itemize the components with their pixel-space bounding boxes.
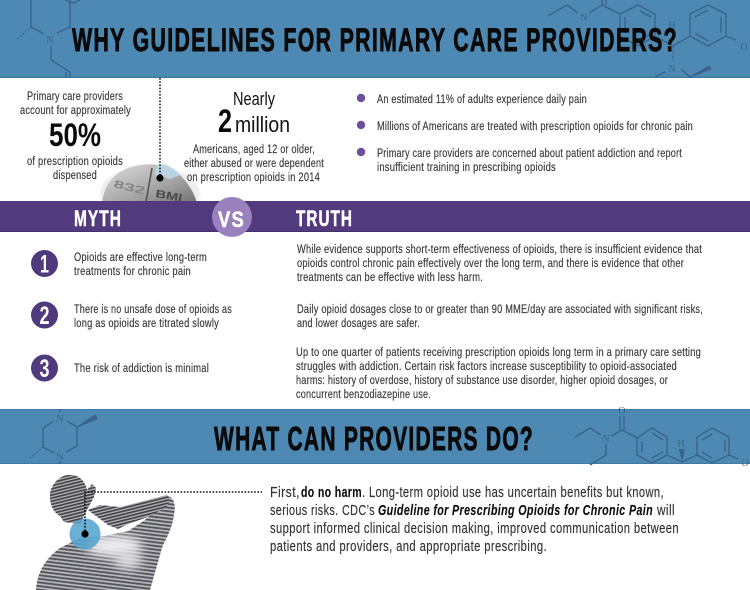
icon: molecule right: H	[668, 20, 676, 31]
bullet list: An estimated 11% of adults experience daily pain	[377, 92, 587, 106]
icon: molecule right: N	[580, 13, 588, 24]
stat: 2 million: 2	[218, 103, 232, 139]
icon: molecule right lower: N	[602, 434, 610, 445]
row 2: myth and truth: long as opioids are titrated slowly	[74, 316, 219, 330]
stat: 50 percent: 50%	[49, 117, 101, 153]
icon: molecule left	[16, 0, 80, 77]
stat: 2 million: on prescription opioids in 2014	[187, 170, 320, 184]
row 1: myth and truth: Opioids are effective long-term	[74, 250, 207, 264]
heading: myth: MYTH	[74, 206, 122, 231]
stat: 50 percent: dispensed	[53, 168, 97, 182]
stat: 50 percent: account for approximately	[20, 103, 131, 117]
text block: do no harm	[270, 485, 679, 555]
row 1: myth and truth: treatments can be effective with less harm.	[297, 270, 483, 284]
stat: 50 percent	[20, 89, 131, 182]
panel: top header	[0, 0, 750, 78]
text block: do no harm: serious risks. CDC’s	[270, 503, 375, 519]
divider with dot: pill callout	[156, 78, 164, 182]
icon: molecule right: N	[668, 64, 676, 75]
stat: 2 million: either abused or were dependent	[184, 156, 324, 170]
callout: dotted leader	[81, 492, 262, 538]
text block: do no harm: patients and providers, and appropriate prescribing.	[270, 539, 547, 555]
row 3: myth and truth	[31, 345, 701, 401]
stat: 50 percent: of prescription opioids	[27, 154, 123, 168]
highlight: blue pain circle	[70, 518, 100, 550]
text block: do no harm: will	[656, 503, 675, 519]
icon: pill: BMI	[154, 188, 183, 205]
icon: molecule left lower: N	[56, 452, 64, 463]
icon: molecule right	[548, 0, 748, 77]
row 2: myth and truth: and lower dosages are safer.	[297, 316, 420, 330]
stat: 2 million: million	[235, 112, 290, 137]
icon: molecule left: N	[46, 35, 54, 46]
row 1: myth and truth	[31, 242, 702, 284]
panel: myth vs truth band	[0, 197, 750, 237]
row 2: myth and truth	[31, 302, 703, 330]
icon: pill	[100, 164, 200, 222]
icon: molecule right lower: O	[618, 406, 626, 417]
vs badge: VS	[218, 207, 245, 232]
row 1: myth and truth: treatments for chronic pain	[74, 264, 191, 278]
row 1: myth and truth: 1	[40, 250, 49, 278]
stat: 2 million: Nearly	[233, 89, 275, 109]
text block: do no harm: . Long-term opioid use has uncertain benefits but known,	[362, 485, 664, 501]
heading: truth: TRUTH	[296, 206, 353, 231]
row 2: myth and truth: There is no unsafe dose of opioids as	[74, 302, 232, 316]
panel: what can providers do band	[0, 406, 750, 469]
icon: molecule right: O	[740, 42, 748, 53]
vs badge	[212, 197, 252, 237]
stat: 50 percent: Primary care providers	[27, 89, 123, 103]
row 3: myth and truth: concurrent benzodiazepine use.	[296, 387, 431, 401]
illustration: man holding neck	[36, 475, 262, 590]
row 3: myth and truth: The risk of addiction is minimal	[74, 361, 209, 375]
icon: molecule right lower	[575, 406, 749, 469]
icon: pill: 832	[112, 178, 146, 198]
bullet list: insufficient training in prescribing opioids	[377, 160, 556, 174]
row 3: myth and truth: 3	[40, 355, 50, 383]
stat: 2 million	[184, 89, 324, 184]
icon: molecule left lower: N	[56, 414, 64, 425]
text block: do no harm: do no harm	[301, 485, 362, 501]
icon: molecule right lower: O	[741, 458, 749, 469]
icon: molecule left lower	[30, 409, 97, 464]
stat: 2 million: Americans, aged 12 or older,	[193, 142, 315, 156]
row 2: myth and truth: 2	[40, 302, 50, 330]
heading: WHAT CAN PROVIDERS DO?	[214, 420, 534, 457]
icon: molecule right lower: H	[677, 439, 685, 450]
text block: do no harm: First,	[270, 485, 300, 501]
text block: do no harm: Guideline for Prescribing Opioids for Chronic Pain	[378, 503, 653, 519]
bullet list	[357, 92, 693, 174]
